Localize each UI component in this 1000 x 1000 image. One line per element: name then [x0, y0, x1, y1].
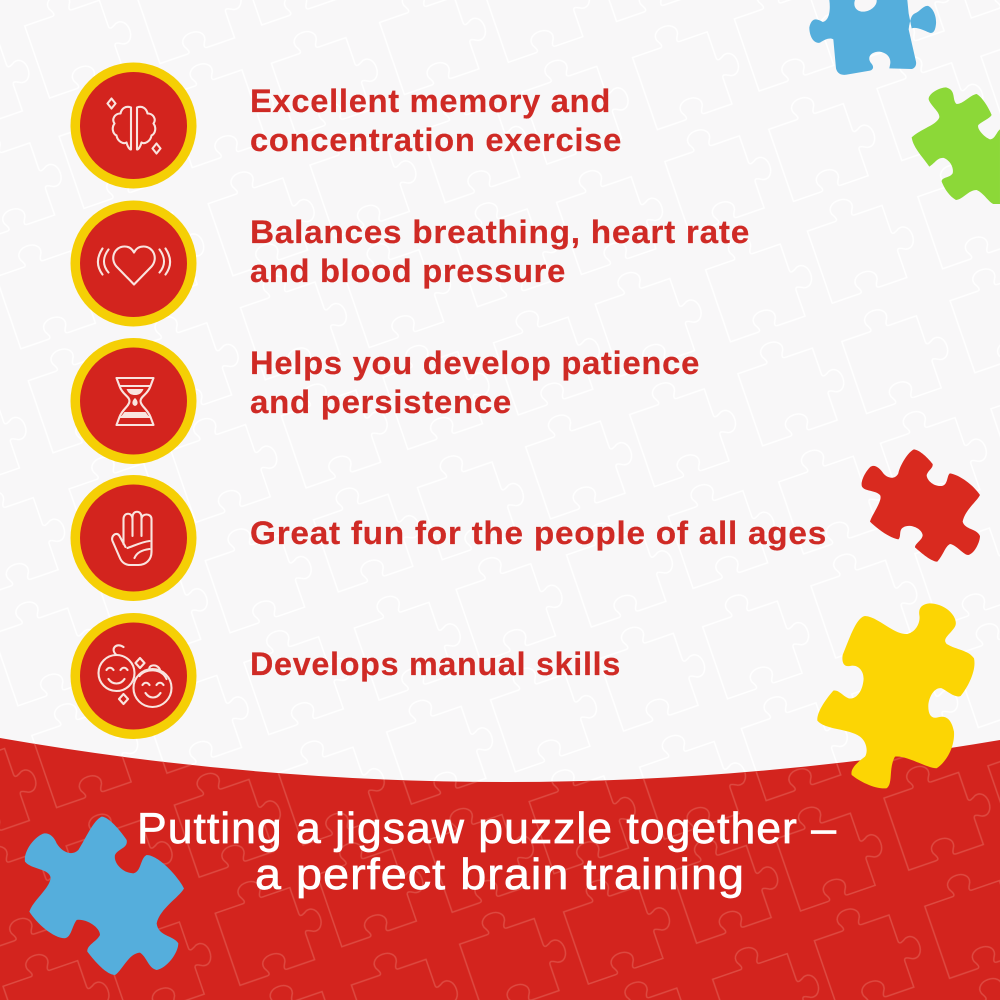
- benefit 4: fun: [70, 475, 827, 601]
- text: fun: Great fun for the people of all ages: [250, 515, 827, 551]
- text: manual skills: Develops manual skills: [250, 646, 621, 682]
- text: breathing: and blood pressure: [250, 253, 566, 289]
- icon: heart badge: [70, 200, 196, 326]
- benefit 2: breathing: [70, 200, 750, 326]
- puzzle piece: red right: [862, 449, 980, 562]
- text: breathing: Balances breathing, heart rate: [250, 214, 750, 250]
- text: memory: [250, 83, 622, 158]
- tagline: a perfect brain training: [255, 850, 745, 899]
- text: breathing: [250, 214, 750, 289]
- icon: hourglass badge: [70, 338, 196, 464]
- icon: hand badge: [70, 475, 196, 601]
- text: memory: concentration exercise: [250, 122, 622, 158]
- text: patience: Helps you develop patience: [250, 345, 700, 381]
- text: memory: Excellent memory and: [250, 83, 611, 119]
- puzzle piece: blue top right: [809, 0, 936, 75]
- red wave band: [0, 738, 1000, 1000]
- puzzle piece: blue bottom left: [25, 817, 184, 975]
- icon: children faces badge: [70, 613, 196, 739]
- puzzle piece: yellow right: [817, 603, 974, 788]
- icon: brain badge: [70, 62, 196, 188]
- puzzle piece: green right: [912, 87, 1000, 204]
- benefit 3: patience: [70, 338, 700, 464]
- text: patience: and persistence: [250, 384, 512, 420]
- text: patience: [250, 345, 700, 420]
- tagline: [137, 804, 837, 899]
- benefit 1: memory: [70, 62, 622, 188]
- benefit 5: manual skills: [70, 613, 621, 739]
- tagline: Putting a jigsaw puzzle together –: [137, 804, 837, 853]
